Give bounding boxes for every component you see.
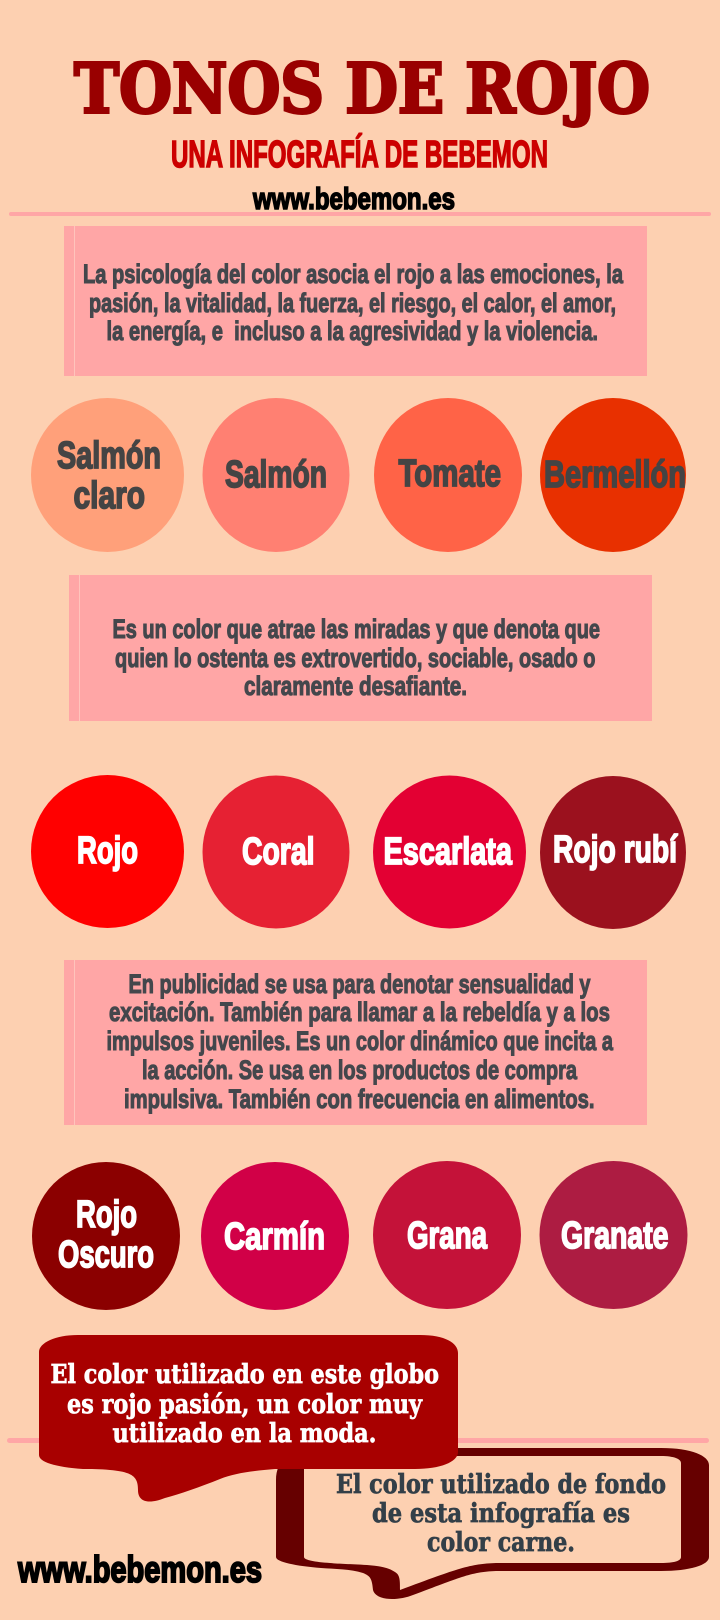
circle: bermellon [540, 398, 686, 552]
circle: rojo oscuro [32, 1162, 180, 1310]
circle: granate [540, 1161, 688, 1309]
panel: psychology text [64, 226, 647, 376]
circle: salmon: Salmón [225, 454, 327, 496]
text: rojo pasion: El color utilizado en este globo [50, 1360, 439, 1390]
text block: psychology [83, 259, 624, 346]
color circles row 3 [32, 1161, 688, 1310]
circle: rojo oscuro: Rojo [76, 1194, 137, 1236]
color circles row 1 [31, 398, 686, 552]
circle: escarlata: Escarlata [384, 831, 513, 873]
text block: attention: claramente desafiante. [244, 671, 467, 701]
text: background colour: El color utilizado de fondo [336, 1470, 666, 1500]
text: rojo pasion: utilizado en la moda. [112, 1419, 376, 1449]
color circles row 2 [31, 775, 686, 929]
circle: rojo rubi [540, 776, 686, 929]
text: background colour: de esta infografía es [372, 1499, 630, 1529]
circle: rojo [31, 775, 184, 928]
speech balloon: rojo pasion [39, 1335, 458, 1502]
panel: attention text [69, 575, 652, 721]
circle: tomate [374, 398, 522, 552]
circle: tomate: Tomate [398, 453, 501, 495]
title: TONOS DE ROJO [74, 50, 650, 130]
circle: grana: Grana [407, 1215, 488, 1257]
text block: advertising [106, 969, 614, 1114]
text block: attention [112, 614, 600, 701]
website link top: www.bebemon.es [252, 181, 455, 216]
circle: rojo oscuro: Oscuro [58, 1234, 154, 1276]
circle: coral: Coral [242, 831, 314, 873]
circle: rojo: Rojo [77, 830, 138, 872]
circle: carmin [201, 1162, 349, 1310]
panel: advertising text [64, 960, 647, 1125]
text: rojo pasion [50, 1360, 439, 1449]
circle: salmon claro [31, 398, 184, 552]
circle: escarlata [373, 776, 526, 928]
website link bottom: www.bebemon.es [17, 1549, 262, 1590]
circle: granate: Granate [561, 1215, 668, 1257]
circle: carmin: Carmín [224, 1216, 325, 1258]
circle: salmon claro: Salmón [57, 435, 161, 477]
circle: salmon claro: claro [74, 475, 145, 517]
circle: grana [373, 1161, 521, 1309]
text: background colour: color carne. [427, 1528, 575, 1558]
text block: advertising: la acción. Se usa en los productos de compra [142, 1055, 578, 1085]
text: rojo pasion: es rojo pasión, un color muy [67, 1390, 423, 1420]
circle: salmon [202, 398, 350, 552]
text: background colour [336, 1470, 666, 1558]
speech balloon: background colour [276, 1448, 709, 1599]
circle: coral [202, 776, 350, 928]
circle: rojo rubi: Rojo rubí [553, 829, 678, 871]
